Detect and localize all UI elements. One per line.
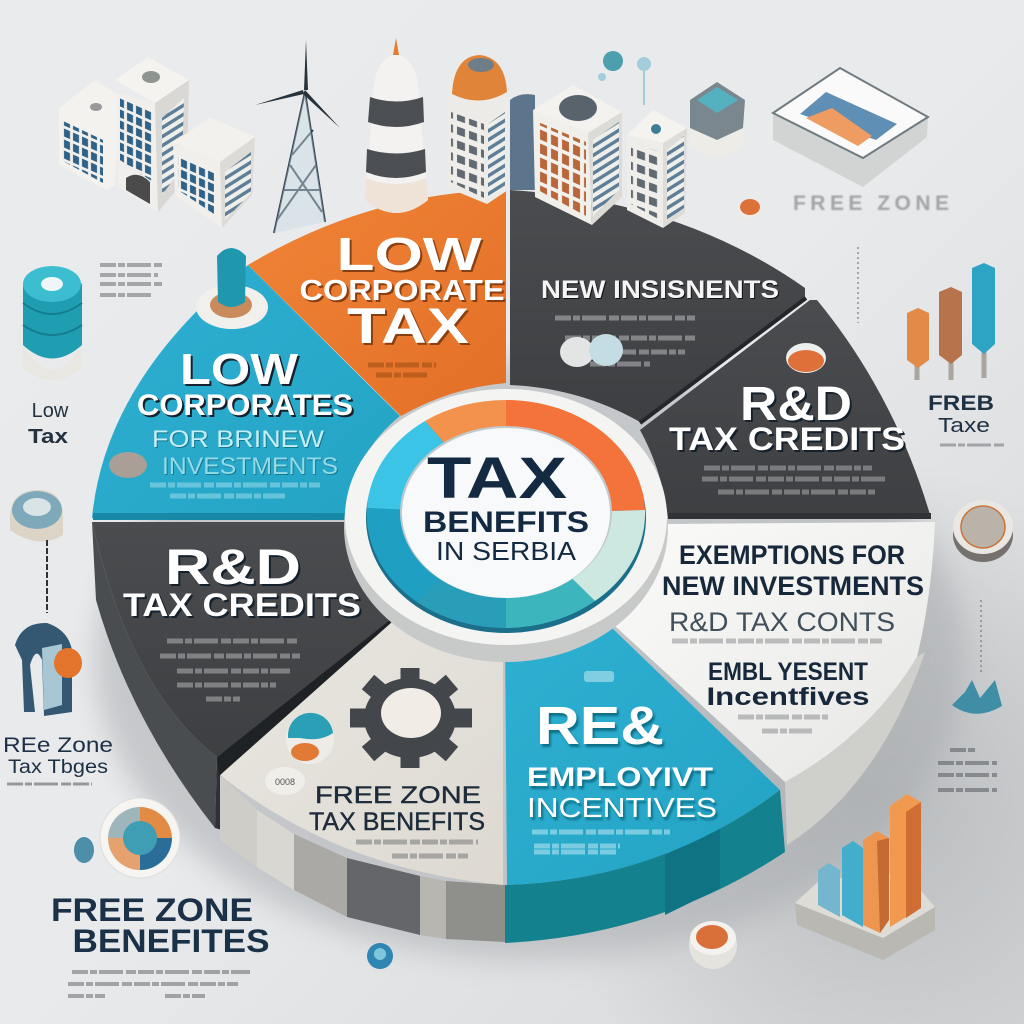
- icon: sphere left: [10, 490, 63, 541]
- icon: figure left: [15, 623, 82, 716]
- label: free taxe: [928, 392, 994, 437]
- segment: low corporate tax (orange): TAX: [347, 298, 469, 354]
- icon: disc right: [953, 500, 1013, 562]
- icon: splash right: [952, 680, 1002, 714]
- title: tax benefits in serbia: [423, 446, 589, 566]
- icon: round tower: [446, 55, 508, 204]
- label: low tax: Tax: [28, 426, 68, 448]
- icon: wind turbine: [255, 40, 340, 233]
- label: free taxe: FREB: [928, 392, 994, 415]
- icon: teal cylinder left: [23, 266, 82, 380]
- label: free zone tax: [3, 734, 113, 778]
- segment: free zone tax benefits (light): FREE ZONE: [315, 782, 481, 809]
- segment: employment incentives (teal): INCENTIVES: [527, 792, 717, 823]
- small mark: [584, 671, 614, 682]
- segment: r&d tax credits right (dark): R&D: [740, 378, 852, 431]
- centre disc: [344, 389, 668, 662]
- caption: [150, 485, 320, 496]
- title: tax benefits in serbia: BENEFITS: [423, 506, 589, 539]
- segment: low corporate tax (orange): LOW: [336, 228, 482, 280]
- label: free zone top right: FREE ZONE: [793, 192, 949, 215]
- icon: lighthouse tower: [365, 38, 428, 213]
- segment: low corporates (teal): CORPORATES: [137, 389, 353, 422]
- segment: r&d tax credits left (dark): TAX CREDITS: [123, 587, 361, 623]
- segment: free zone tax benefits (light): TAX BENEFITS: [309, 808, 485, 836]
- backdrop shape behind towers: [510, 94, 535, 190]
- caption: [555, 318, 695, 364]
- segment: exemptions (white): NEW INVESTMENTS: [662, 571, 924, 601]
- icon: buildings top left: [59, 57, 255, 228]
- icon: small device: [109, 452, 147, 478]
- caption: [672, 641, 882, 731]
- caption: [7, 782, 92, 786]
- segment: new incentives (dark): [510, 190, 805, 422]
- icon: bars right: [907, 263, 995, 380]
- segment: low corporates (teal): [92, 265, 400, 520]
- segment: employment incentives (teal): [505, 628, 780, 885]
- title: tax benefits in serbia: TAX: [427, 446, 567, 511]
- label: free zone benefits: FREE ZONE: [51, 892, 253, 928]
- label: low tax: [28, 400, 69, 448]
- segment: r&d tax credits left (dark): [92, 522, 392, 776]
- caption: [940, 444, 1006, 446]
- label: free zone benefits: [51, 892, 270, 959]
- caption top left: [100, 265, 162, 295]
- ring segments: [367, 400, 645, 628]
- segment: low corporates (teal): INVESTMENTS: [162, 453, 338, 480]
- pie shadow: [95, 360, 965, 960]
- icon: teal dot: [367, 943, 393, 969]
- segment: employment incentives (teal): EMPLOYIVT: [527, 762, 714, 792]
- icon: small badge: [286, 713, 334, 764]
- segment: free zone tax benefits (light): [220, 622, 503, 885]
- label: free zone benefits: BENEFITES: [72, 923, 270, 959]
- caption: [368, 365, 436, 375]
- dotted leader top right: [857, 247, 859, 323]
- segment: exemptions (white): [615, 522, 935, 782]
- icon: colourful building: [533, 85, 622, 225]
- segment: employment incentives (teal): RE&: [536, 696, 664, 756]
- segment: exemptions (white): EMBL YESENT: [708, 658, 868, 686]
- segment: low corporate tax (orange): CORPORATE: [300, 275, 504, 307]
- icon: pebbles: [560, 334, 623, 367]
- label: free taxe: Taxe: [938, 415, 990, 437]
- icon: donut bottom left: [74, 798, 180, 878]
- caption: [532, 832, 670, 852]
- segment: r&d tax credits left (dark): R&D: [165, 539, 301, 595]
- icon: cube device: [690, 82, 745, 158]
- icon: pill: [265, 767, 305, 795]
- label: free zone tax: Tax Tbges: [8, 757, 108, 778]
- caption right: [938, 750, 997, 790]
- icon: small building: [627, 110, 687, 228]
- icon: orange badge: [786, 343, 826, 373]
- segment: exemptions (white): R&D TAX CONTS: [669, 607, 895, 637]
- segment: r&d tax credits right (dark): TAX CREDITS: [669, 421, 905, 457]
- pie chart: [92, 190, 935, 943]
- segment: low corporates (teal): FOR BRINEW: [152, 426, 324, 453]
- icon: bar chart bottom right: [795, 794, 935, 960]
- icon: teal pin on pie: [196, 248, 268, 329]
- caption bottom left: [68, 972, 250, 996]
- icon: document tablet: [773, 68, 928, 187]
- caption: [356, 842, 478, 856]
- icon: orange dot: [738, 199, 760, 218]
- dotted leader left: [46, 540, 48, 613]
- label: free zone tax: REe Zone: [3, 734, 113, 757]
- segment: new incentives (dark): NEW INSISNENTS: [541, 276, 779, 304]
- segment: exemptions (white): EXEMPTIONS FOR: [679, 540, 905, 570]
- title: tax benefits in serbia: IN SERBIA: [436, 536, 577, 566]
- segment: low corporate tax (orange): [248, 190, 506, 416]
- label: low tax: Low: [32, 400, 69, 422]
- icon: orange button bottom: [689, 921, 737, 969]
- segment: low corporates (teal): LOW: [180, 345, 299, 394]
- icon: pill: 0008: [275, 777, 295, 787]
- segment: exemptions (white): Incentfives: [706, 683, 870, 711]
- icon: gear: [350, 668, 472, 768]
- caption: [702, 468, 885, 492]
- segment: r&d tax credits right (dark): [640, 298, 931, 519]
- icon: droplets: [598, 51, 651, 105]
- caption: [160, 641, 300, 699]
- dotted leader right: [980, 600, 982, 675]
- pie side walls: [92, 522, 925, 943]
